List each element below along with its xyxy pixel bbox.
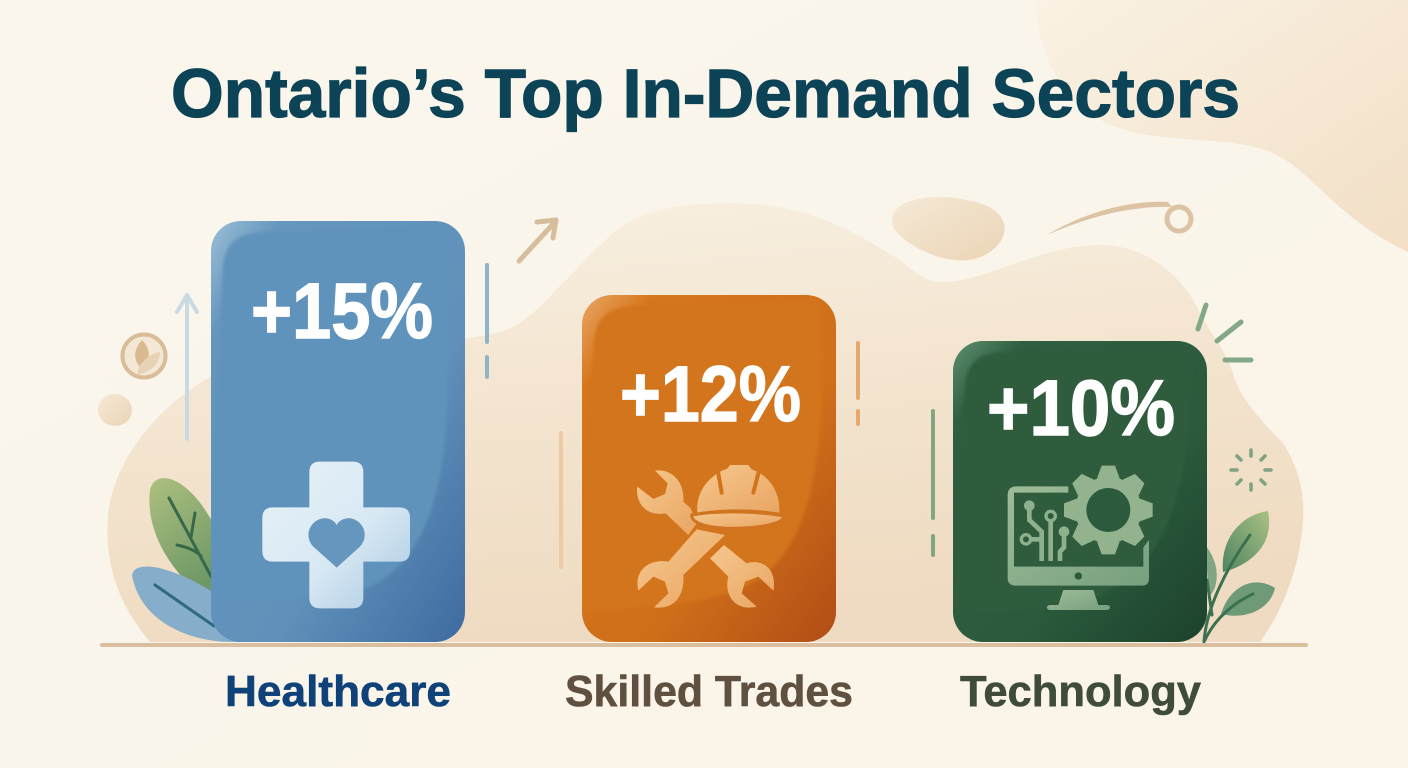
panel: skilled trades bar xyxy=(576,295,836,642)
decorative pebble: left xyxy=(98,394,132,426)
ground line xyxy=(100,643,1308,647)
accent lines: technology left xyxy=(931,411,935,555)
icon: monitor with circuit and gear xyxy=(1008,466,1153,610)
arrow: up beside healthcare xyxy=(177,295,197,439)
accent ticks: technology xyxy=(1198,305,1251,360)
label: skilled trades: Skilled Trades xyxy=(565,667,853,716)
accent lines: healthcare xyxy=(485,265,489,377)
value: +12%: +12% xyxy=(620,349,801,438)
icon: medical cross with heart xyxy=(262,462,410,608)
decorative pebble: top xyxy=(892,197,1005,260)
title: Ontario’s Top In-Demand Sectors xyxy=(171,55,1240,132)
background blob: central wave xyxy=(107,203,1303,642)
leaf cluster: right xyxy=(1204,511,1275,642)
label: technology: Technology xyxy=(960,667,1202,716)
value: +15%: +15% xyxy=(251,266,433,355)
icon: leaf coin xyxy=(122,334,166,378)
icon: crossed wrenches and hard hat xyxy=(637,465,784,608)
arrow: diagonal up xyxy=(519,220,556,261)
accent line: skilled trades left xyxy=(559,433,563,567)
accent lines: skilled trades right xyxy=(856,343,860,424)
background blob: top right xyxy=(1037,0,1408,252)
leaf cluster: left xyxy=(132,478,240,642)
panel: healthcare bar xyxy=(205,221,465,642)
label: healthcare: Healthcare xyxy=(225,667,451,716)
value: +10%: +10% xyxy=(987,363,1175,452)
panel: technology bar xyxy=(948,341,1207,642)
decorative swoosh with ring xyxy=(1047,202,1191,235)
icon: sparkle burst xyxy=(1231,450,1271,490)
